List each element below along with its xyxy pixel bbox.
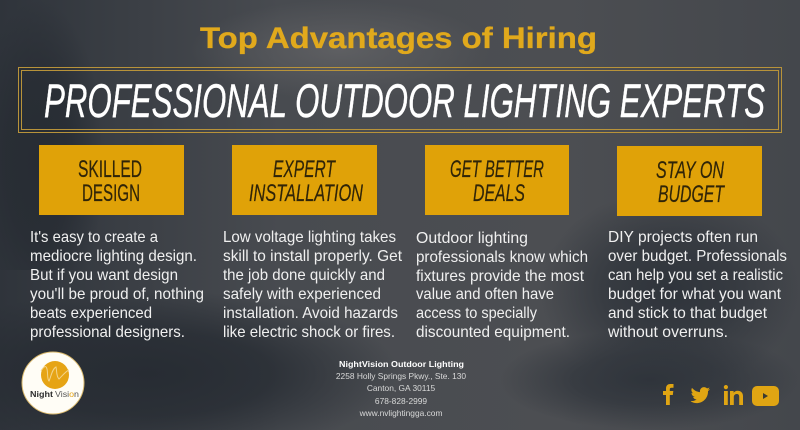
body text: expert installation: skill to install properly. Get xyxy=(223,248,403,265)
body text: stay on budget: can help you set a realistic xyxy=(608,267,783,284)
icon: facebook xyxy=(663,384,674,405)
body text: get better deals: value and often have xyxy=(416,286,554,303)
footer contact details: 678-828-2999 xyxy=(375,396,427,406)
panel: skilled design xyxy=(30,145,208,341)
icon: youtube xyxy=(752,386,779,406)
body text: get better deals: Outdoor lighting xyxy=(416,230,528,247)
heading box: expert installation: INSTALLATION xyxy=(249,180,363,207)
logo: Night Vision: Night xyxy=(30,389,53,399)
heading box: skilled design: DESIGN xyxy=(82,180,140,207)
body text: skilled design: you'll be proud of, nothing xyxy=(30,286,204,303)
heading box: get better deals xyxy=(425,145,569,215)
heading box: stay on budget xyxy=(617,146,762,216)
heading box: skilled design xyxy=(39,145,184,215)
body text: get better deals: discounted equipment. xyxy=(416,324,570,341)
body text: get better deals: access to specially xyxy=(416,305,537,322)
body text: get better deals: fixtures provide the most xyxy=(416,268,585,285)
body text: expert installation: Low voltage lighting takes xyxy=(223,229,396,246)
body text: skilled design: But if you want design xyxy=(30,267,178,284)
body text: skilled design: mediocre lighting design. xyxy=(30,248,197,265)
body text: stay on budget: without overruns. xyxy=(607,324,728,341)
body text: expert installation: like electric shock or fires. xyxy=(223,324,395,341)
body text: expert installation: installation. Avoid hazards xyxy=(223,305,398,322)
body text: expert installation: the job done quickly and xyxy=(223,267,385,284)
heading box: stay on budget: STAY ON xyxy=(656,157,724,184)
heading box: get better deals: DEALS xyxy=(473,180,525,207)
footer contact details: www.nvlightingga.com xyxy=(359,408,442,418)
logo: Night Vision xyxy=(22,352,84,414)
body text: stay on budget: budget for what you want xyxy=(608,286,782,303)
body text: skilled design: It's easy to create a xyxy=(30,229,158,246)
panel: expert installation xyxy=(223,145,406,341)
social icons xyxy=(663,384,779,406)
logo: Night Vision: Vision xyxy=(55,389,79,399)
body text: stay on budget: DIY projects often run xyxy=(608,229,758,246)
body text: stay on budget: and stick to that budget xyxy=(608,305,768,322)
body text: get better deals: professionals know which xyxy=(416,249,588,266)
heading box: stay on budget: BUDGET xyxy=(658,181,726,208)
heading box: get better deals: GET BETTER xyxy=(450,156,544,183)
heading box: skilled design: SKILLED xyxy=(78,156,142,183)
body text: expert installation: safely with experienced xyxy=(223,286,381,303)
body text: skilled design: beats experienced xyxy=(30,305,152,322)
icon: linkedin xyxy=(724,385,743,405)
banner xyxy=(18,68,782,132)
heading box: expert installation: EXPERT xyxy=(273,156,337,183)
footer contact details: NightVision Outdoor Lighting xyxy=(339,359,464,369)
icon: twitter xyxy=(691,387,710,403)
footer contact details: Canton, GA 30115 xyxy=(367,383,435,393)
footer contact details: 2258 Holly Springs Pkwy., Ste. 130 xyxy=(336,371,466,381)
panel: get better deals xyxy=(416,145,592,341)
footer contact details xyxy=(336,359,466,418)
body text: stay on budget: over budget. Professionals xyxy=(608,248,787,265)
title: Top Advantages of Hiring xyxy=(200,22,597,55)
panel: stay on budget xyxy=(607,146,791,341)
heading box: expert installation xyxy=(232,145,377,215)
body text: skilled design: professional designers. xyxy=(30,324,185,341)
